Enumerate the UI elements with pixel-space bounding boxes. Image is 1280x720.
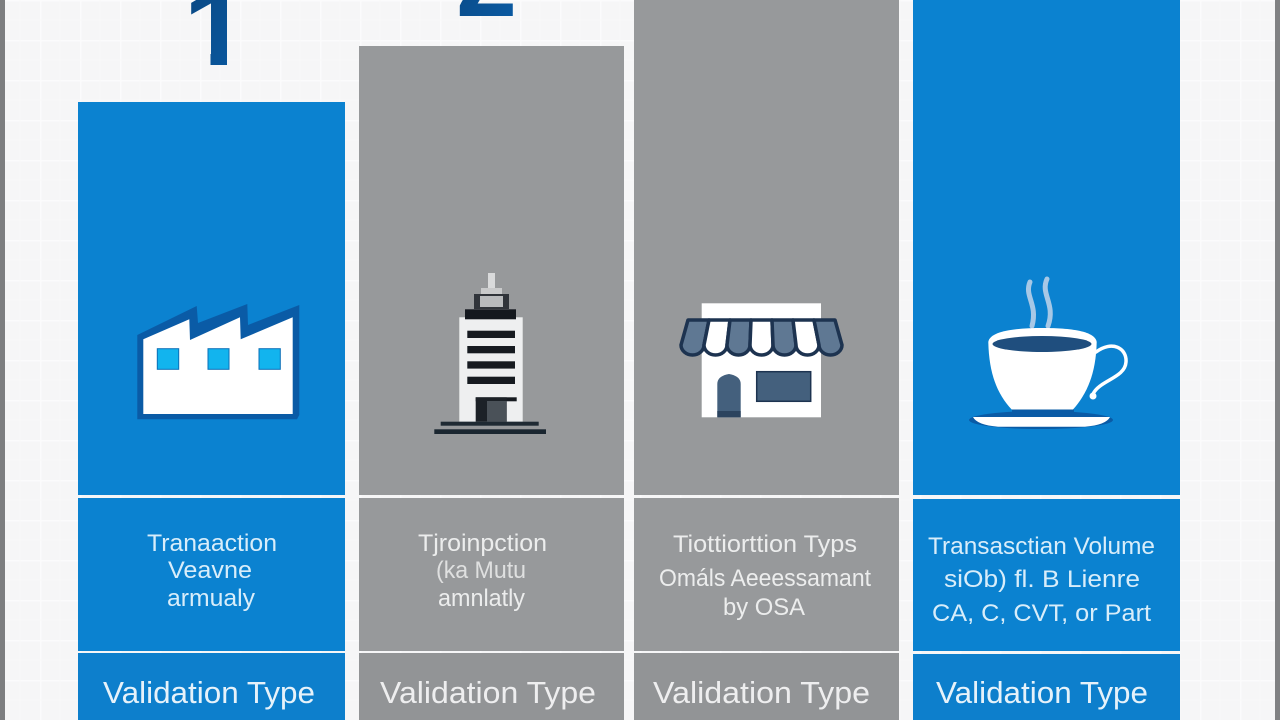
panel: column 3 xyxy=(634,0,899,720)
panel: column 1 xyxy=(78,102,345,720)
column 4 top block xyxy=(913,0,1180,495)
column 1 description block: Veavne xyxy=(168,557,252,584)
icon: coffee cup xyxy=(969,279,1126,429)
column 3 top block xyxy=(634,0,899,495)
column 1 description block: Tranaaction xyxy=(147,530,277,557)
column 2 top block xyxy=(359,46,624,495)
column 4 description block: CA, C, CVT, or Part xyxy=(932,600,1151,627)
panel: column 2 xyxy=(359,46,624,720)
icon: storefront xyxy=(681,303,842,417)
column 1 top block xyxy=(78,102,345,495)
column 4 description block: siOb) fl. B Lienre xyxy=(944,566,1140,593)
column 3 description block: by OSA xyxy=(723,594,805,621)
panel: column 4 xyxy=(913,0,1180,720)
column 2 validation type label xyxy=(359,653,624,720)
column 4 validation type label xyxy=(913,654,1180,720)
column 2 description block xyxy=(359,498,624,651)
column 3 description block xyxy=(634,498,899,651)
column 1 description block: armualy xyxy=(167,585,255,612)
icon: factory xyxy=(137,304,299,419)
column 4 description block xyxy=(913,499,1180,651)
column 4 validation type label: Validation Type xyxy=(936,675,1148,710)
column 1 validation type label xyxy=(78,653,345,720)
icon: office tower xyxy=(434,273,546,434)
column 2 description block: amnlatly xyxy=(438,585,525,612)
column 2 description block: Tjroinpction xyxy=(418,530,547,557)
column 2 description block: (ka Mutu xyxy=(436,557,526,584)
column 2 validation type label: Validation Type xyxy=(380,675,596,710)
column 3 description block: Tiottiorttion Typs xyxy=(673,531,857,558)
column 1 validation type label: Validation Type xyxy=(103,675,315,710)
column 3 validation type label xyxy=(634,653,899,720)
column 3 description block: Omáls Aeeessamant xyxy=(659,565,871,592)
column 1 description block xyxy=(78,498,345,651)
column 3 validation type label: Validation Type xyxy=(653,675,870,710)
column 4 description block: Transasctian Volume xyxy=(928,533,1155,560)
